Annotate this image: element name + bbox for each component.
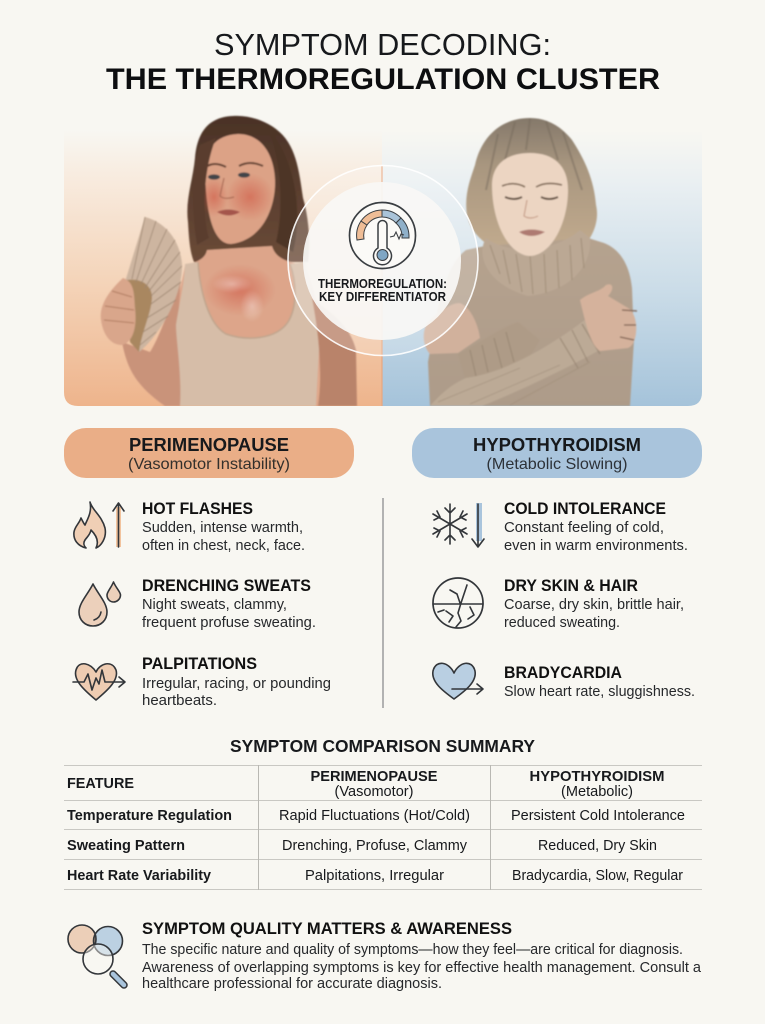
callout: symptom quality: SYMPTOM QUALITY MATTERS & AWARENESS [142,920,512,938]
outer ring [288,166,478,356]
table header: PERIMENOPAUSE [310,768,438,785]
badge: thermoregulation key differentiator [288,166,478,356]
icon: heart with pulse [73,664,125,700]
hero image panel [64,116,702,406]
text: hot flashes: Sudden, intense warmth, [142,520,303,536]
text: dry skin and hair: reduced sweating. [504,615,620,631]
inner disc [303,182,461,340]
icon: thermometer gauge [350,202,416,268]
text: palpitations: heartbeats. [142,693,217,709]
callout: symptom quality: The specific nature and quality of symptoms—how they feel—are critical for diagnosis. [142,942,683,958]
row: temperature regulation: Temperature Regulation [67,807,232,824]
symptom: palpitations [73,655,331,709]
comparison table [64,765,702,890]
row: sweating pattern: Sweating Pattern [67,837,185,854]
row: heart rate variability [67,867,683,884]
text: drenching sweats: frequent profuse sweating. [142,615,316,631]
title: SYMPTOM DECODING: [214,27,551,62]
icon: sweat drops [79,582,120,626]
callout: symptom quality [142,920,702,992]
text: bradycardia: BRADYCARDIA [504,664,622,682]
text: drenching sweats: Night sweats, clammy, [142,597,287,613]
row: heart rate variability: Palpitations, Irregular [305,867,444,884]
text: palpitations: Irregular, racing, or pounding [142,676,331,692]
text: bradycardia [504,664,695,700]
row: heart rate variability: Bradycardia, Slow, Regular [512,867,683,884]
icon: cracked skin [433,578,483,628]
text: dry skin and hair [504,577,684,631]
text: drenching sweats: DRENCHING SWEATS [142,577,311,595]
table header: FEATURE [67,775,134,792]
icon: flame and up arrow [74,502,124,548]
callout: symptom quality: healthcare professional for accurate diagnosis. [142,976,442,992]
illustration: woman in sweater feeling cold [424,118,637,406]
symptom: hot flashes [74,500,305,554]
panel: cool background [382,160,702,406]
pill: perimenopause: (Vasomotor Instability) [128,456,290,473]
table header: (Vasomotor) [334,783,414,800]
pill: perimenopause [64,428,354,478]
text: dry skin and hair: Coarse, dry skin, brittle hair, [504,597,684,613]
row: sweating pattern: Drenching, Profuse, Clammy [282,837,467,854]
text: cold intolerance [504,500,688,554]
icon: overlapping circles with magnifier [68,925,124,985]
row: heart rate variability: Heart Rate Variability [67,867,212,884]
text: dry skin and hair: DRY SKIN & HAIR [504,577,638,595]
text: palpitations: PALPITATIONS [142,655,257,673]
badge label [318,277,447,304]
title: THE THERMOREGULATION CLUSTER [106,63,660,96]
text: bradycardia: Slow heart rate, sluggishness. [504,684,695,700]
row: sweating pattern: Reduced, Dry Skin [538,837,657,854]
title [106,27,660,96]
row: sweating pattern [67,837,657,854]
badge label: KEY DIFFERENTIATOR [319,290,446,304]
heading: comparison summary: SYMPTOM COMPARISON SUMMARY [230,736,535,756]
symptom: dry skin and hair [433,577,684,631]
pill: hypothyroidism [412,428,702,478]
panel: warm background [64,130,382,406]
column divider [382,498,384,708]
text: cold intolerance: Constant feeling of cold, [504,520,664,536]
pill: hypothyroidism: (Metabolic Slowing) [486,456,628,473]
row: temperature regulation [67,807,685,824]
text: hot flashes: often in chest, neck, face. [142,538,305,554]
symptom: cold intolerance [433,500,688,554]
row: temperature regulation: Persistent Cold Intolerance [511,807,685,824]
text: hot flashes: HOT FLASHES [142,500,253,518]
table header [67,768,664,800]
table header: (Metabolic) [561,783,633,800]
icon: heart with slow arrow [433,663,483,699]
pill: perimenopause: PERIMENOPAUSE [129,435,289,455]
text: drenching sweats [142,577,316,631]
icon: snowflake and down arrow [433,503,484,547]
callout: symptom quality: Awareness of overlapping symptoms is key for effective health management. Consult a [142,960,702,976]
text: cold intolerance: COLD INTOLERANCE [504,500,666,518]
row: temperature regulation: Rapid Fluctuations (Hot/Cold) [279,807,470,824]
table header: HYPOTHYROIDISM [530,768,664,785]
text: palpitations [142,655,331,709]
illustration: woman with hot flash and fan [101,116,357,406]
text: hot flashes [142,500,305,554]
text: cold intolerance: even in warm environments. [504,538,688,554]
pill: hypothyroidism: HYPOTHYROIDISM [473,435,641,455]
center divider strip [381,166,383,406]
symptom: drenching sweats [79,577,316,631]
symptom: bradycardia [433,663,695,700]
badge label: THERMOREGULATION: [318,277,447,291]
